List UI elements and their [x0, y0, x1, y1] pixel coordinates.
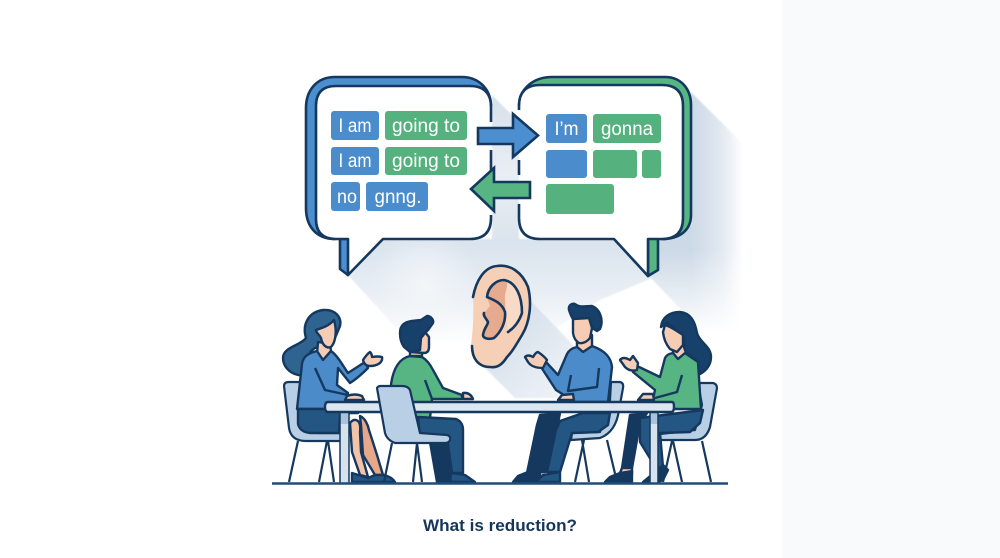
person: left woman — [283, 310, 395, 482]
chair: right woman — [660, 383, 717, 482]
chip: gonna — [593, 114, 661, 143]
icon: ear — [471, 266, 530, 367]
long shadows — [348, 92, 745, 398]
chip: going to second row — [385, 147, 467, 175]
chip: I'm — [546, 114, 587, 143]
chair: left woman — [284, 382, 345, 482]
chip: I am: I am — [338, 116, 372, 137]
blank chips — [546, 150, 661, 214]
panel: left speech bubble — [306, 77, 491, 275]
chip: going to second row: going to — [392, 151, 460, 172]
chip: I am second row — [331, 147, 379, 175]
arrow: blue right — [478, 114, 538, 157]
chip: I'm: I’m — [554, 119, 578, 140]
figures: seated people and table — [272, 304, 728, 484]
chip: gnng. — [366, 182, 428, 211]
person: man in green — [391, 316, 475, 482]
panel: right speech bubble — [519, 77, 691, 276]
ground line — [272, 482, 728, 485]
chip: no — [331, 182, 360, 211]
chip: going to: going to — [392, 116, 460, 137]
chip: gnng.: gnng. — [374, 187, 422, 208]
chip: gonna: gonna — [601, 119, 653, 140]
caption: What is reduction? — [423, 516, 577, 535]
person: right woman — [605, 312, 711, 482]
chair: man in blue — [571, 382, 623, 482]
table — [325, 402, 674, 483]
chair: front chair — [377, 386, 451, 482]
arrow: green left — [471, 168, 530, 211]
person: man in blue — [513, 304, 612, 482]
chip: I am second row: I am — [338, 151, 372, 172]
chip: going to — [385, 111, 467, 140]
chip: no: no — [337, 187, 357, 208]
chip: I am — [331, 111, 379, 140]
